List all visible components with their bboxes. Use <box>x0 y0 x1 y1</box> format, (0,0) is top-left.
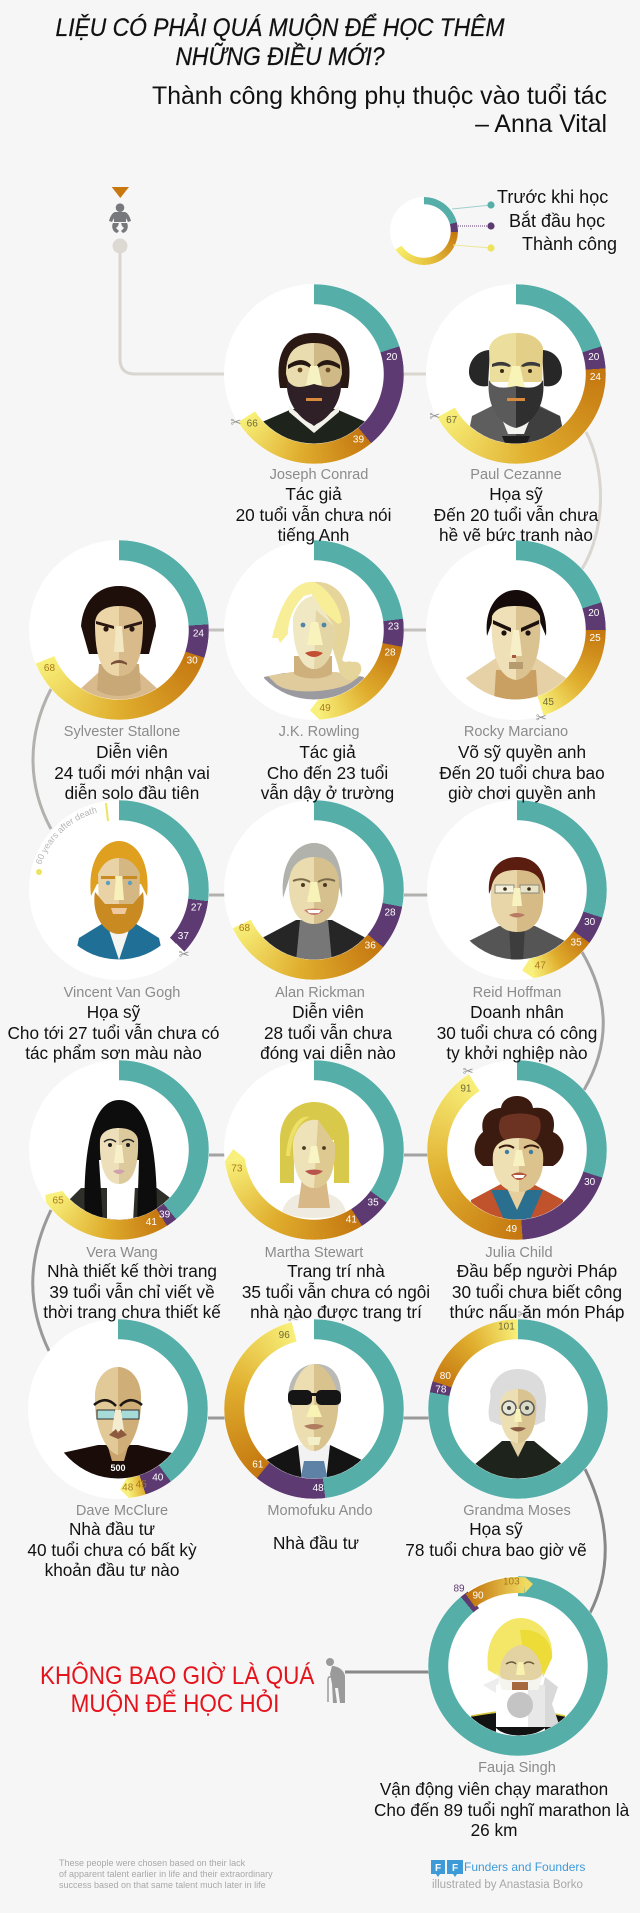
name: Momofuku Ando <box>267 1502 373 1519</box>
logo and credit <box>431 1860 585 1891</box>
description: hề vẽ bức tranh nào <box>439 525 593 545</box>
portrait and age labels: 41 <box>346 1215 357 1226</box>
portrait and age labels: 39 <box>159 1210 170 1221</box>
portrait and age labels: 30 <box>187 656 198 667</box>
portrait and age labels: ✂ <box>230 415 241 430</box>
portrait and age labels: 24 <box>590 372 601 383</box>
person: J.K. Rowling <box>224 540 404 803</box>
description: Đầu bếp người Pháp <box>457 1261 617 1281</box>
name: J.K. Rowling <box>278 723 359 740</box>
subtitle: – Anna Vital <box>475 111 607 138</box>
description: Nhà đầu tư <box>273 1533 359 1553</box>
portrait and age labels: 27 <box>191 902 202 913</box>
portrait and age labels: 91 <box>460 1084 472 1095</box>
description: Trang trí nhà <box>287 1261 385 1281</box>
person: Vincent Van Gogh <box>8 800 219 1063</box>
name: Vera Wang <box>86 1244 158 1261</box>
portrait and age labels: 68 <box>239 923 250 934</box>
description: Vận động viên chạy marathon <box>380 1779 608 1799</box>
description <box>260 742 394 803</box>
person: Martha Stewart <box>224 1060 430 1322</box>
description: Võ sỹ quyền anh <box>458 742 586 762</box>
text: ✂ <box>517 1308 528 1323</box>
description: 20 tuổi vẫn chưa nói <box>236 504 391 524</box>
portrait and age labels: 20 <box>588 352 600 363</box>
person: Reid Hoffman <box>427 800 607 1063</box>
person: Momofuku Ando <box>224 1312 404 1553</box>
person: Vera Wang <box>29 1060 221 1322</box>
portrait and age labels: 24 <box>193 629 204 640</box>
description: giờ chơi quyền anh <box>448 783 596 803</box>
portrait and age labels: ✂ <box>179 948 190 963</box>
portrait and age labels: 45 <box>136 1480 147 1491</box>
description: Diễn viên <box>96 742 168 762</box>
person: Sylvester Stallone <box>29 540 210 803</box>
name: Grandma Moses <box>463 1502 571 1519</box>
portrait and age labels <box>435 1308 561 1478</box>
portrait and age labels: 65 <box>52 1196 64 1207</box>
legend labels <box>497 187 617 254</box>
description: tác phẩm sơn màu nào <box>25 1043 202 1063</box>
icon: F&F logo <box>431 1860 463 1877</box>
description: Cho đến 23 tuổi <box>267 762 388 782</box>
icon: baby start marker <box>109 187 131 254</box>
description: tiếng Anh <box>278 525 349 545</box>
portrait and age labels: 20 <box>588 608 600 619</box>
name: Vincent Van Gogh <box>64 984 180 1000</box>
subtitle: Thành công không phụ thuộc vào tuổi tác <box>152 83 607 110</box>
description: Đến 20 tuổi vẫn chưa <box>434 504 598 524</box>
footer note: of apparent talent earlier in life and their extraordinary <box>59 1869 273 1879</box>
portrait and age labels: 60 years after death <box>36 807 97 864</box>
description: 24 tuổi mới nhận vai <box>54 762 210 782</box>
portrait and age labels: 45 <box>543 697 554 708</box>
description <box>434 484 598 545</box>
description <box>260 1002 396 1063</box>
legend: ring key <box>390 197 495 265</box>
footer note <box>59 1858 273 1890</box>
portrait and age labels: 48 <box>312 1483 324 1494</box>
portrait and age labels: 35 <box>368 1198 379 1209</box>
portrait and age labels: ✂ <box>463 1064 474 1079</box>
person: Fauja Singh <box>374 1576 630 1840</box>
portrait and age labels: 66 <box>246 419 258 430</box>
callout <box>40 1662 314 1718</box>
subtitle <box>152 83 607 138</box>
footer note: These people were chosen based on their lack <box>59 1858 245 1868</box>
portrait and age labels <box>453 1576 566 1736</box>
portrait and age labels: 48 <box>122 1482 134 1493</box>
portrait and age labels <box>470 857 595 978</box>
name: Martha Stewart <box>265 1244 363 1261</box>
portrait and age labels <box>460 1064 596 1235</box>
portrait and age labels: 41 <box>145 1217 157 1228</box>
name: Dave McClure <box>76 1502 168 1519</box>
description: 78 tuổi chưa bao giờ vẽ <box>405 1540 587 1560</box>
description <box>27 1519 197 1580</box>
portrait and age labels <box>230 333 397 445</box>
portrait and age labels: 28 <box>384 648 396 659</box>
portrait and age labels: 103 <box>503 1576 520 1588</box>
person: Alan Rickman <box>224 800 404 1063</box>
portrait and age labels: 30 <box>584 917 595 928</box>
portrait and age labels <box>429 333 601 444</box>
portrait and age labels <box>252 1312 362 1494</box>
description: Cho tới 27 tuổi vẫn chưa có <box>8 1022 219 1042</box>
callout: MUỘN ĐỂ HỌC HỎI <box>71 1690 279 1718</box>
portrait and age labels <box>44 586 204 700</box>
description: Họa sỹ <box>469 1519 523 1539</box>
icon: F&F logo: F <box>452 1863 458 1874</box>
portrait and age labels: 78 <box>435 1384 447 1395</box>
description: nhà nào được trang trí <box>250 1302 422 1322</box>
portrait and age labels <box>64 1367 172 1498</box>
person: Dave McClure <box>27 1319 208 1580</box>
description: Đến 20 tuổi chưa bao <box>439 762 605 782</box>
logo and credit: illustrated by Anastasia Borko <box>432 1879 583 1891</box>
person: Julia Child <box>427 1060 624 1322</box>
description: thời trang chưa thiết kế <box>43 1302 221 1322</box>
portrait and age labels: 96 <box>278 1330 290 1341</box>
description: Họa sỹ <box>489 484 543 504</box>
description: 40 tuổi chưa có bất kỳ <box>27 1540 197 1560</box>
description: 30 tuổi chưa có công <box>437 1022 597 1042</box>
description <box>54 742 210 803</box>
portrait and age labels: 101 <box>498 1321 515 1332</box>
description <box>405 1519 587 1560</box>
name: Joseph Conrad <box>269 466 368 483</box>
portrait and age labels: 49 <box>319 703 331 714</box>
portrait and age labels: 40 <box>152 1472 164 1483</box>
icon: old man with cane <box>326 1658 345 1703</box>
name: Julia Child <box>485 1244 553 1261</box>
name: Paul Cezanne <box>470 466 562 483</box>
icon: F&F logo: F <box>435 1863 441 1874</box>
logo and credit: Funders and Founders <box>464 1860 585 1874</box>
title: NHỮNG ĐIỀU MỚI? <box>175 43 385 71</box>
description <box>43 1261 221 1322</box>
legend labels: Trước khi học <box>497 187 608 207</box>
description: thức nấu ăn món Pháp <box>450 1302 624 1322</box>
description <box>236 484 391 545</box>
portrait and age labels: 37 <box>178 931 189 942</box>
description: Tác giả <box>299 742 356 762</box>
callout: KHÔNG BAO GIỜ LÀ QUÁ <box>40 1662 314 1690</box>
portrait and age labels: 80 <box>440 1371 451 1382</box>
legend labels: Bắt đầu học <box>509 210 605 230</box>
portrait and age labels <box>264 582 399 720</box>
description: 39 tuổi vẫn chỉ viết về <box>49 1282 215 1302</box>
portrait and age labels: 39 <box>352 434 364 445</box>
description: khoản đầu tư nào <box>45 1560 179 1580</box>
description: 35 tuổi vẫn chưa có ngôi <box>242 1282 430 1302</box>
name: Reid Hoffman <box>473 984 561 1000</box>
portrait and age labels: 25 <box>590 633 601 644</box>
portrait and age labels: 28 <box>384 908 396 919</box>
portrait and age labels: 73 <box>231 1164 243 1175</box>
portrait and age labels <box>466 590 601 726</box>
description: Doanh nhân <box>470 1002 564 1022</box>
portrait and age labels: ✂ <box>536 711 547 726</box>
person: Paul Cezanne <box>426 284 606 545</box>
portrait and age labels: 30 <box>584 1177 596 1188</box>
name: Sylvester Stallone <box>64 723 180 740</box>
description <box>439 742 605 803</box>
portrait and age labels: 89 <box>453 1584 465 1594</box>
name: Alan Rickman <box>275 984 365 1000</box>
portrait and age labels: 20 <box>386 352 397 363</box>
description <box>8 1002 219 1063</box>
portrait and age labels: ✂ <box>287 1312 298 1327</box>
portrait and age labels: 36 <box>365 941 376 952</box>
description: 26 km <box>471 1820 517 1840</box>
description <box>437 1002 597 1063</box>
portrait and age labels: 49 <box>506 1224 517 1235</box>
description: 28 tuổi vẫn chưa <box>264 1022 392 1042</box>
portrait and age labels <box>224 1102 379 1226</box>
portrait and age labels: ✂ <box>429 410 440 425</box>
description <box>450 1261 624 1322</box>
portrait and age labels: 23 <box>387 622 399 633</box>
description: Nhà đầu tư <box>69 1519 155 1539</box>
person: Rocky Marciano <box>426 540 606 803</box>
portrait and age labels: 61 <box>252 1460 263 1471</box>
description <box>242 1261 430 1322</box>
person: Joseph Conrad <box>224 284 404 545</box>
description: đóng vai diễn nào <box>260 1043 396 1063</box>
name: Rocky Marciano <box>464 723 568 740</box>
description: Nhà thiết kế thời trang <box>47 1261 217 1281</box>
portrait and age labels: 47 <box>534 961 546 972</box>
description: Diễn viên <box>292 1002 364 1022</box>
description: diễn solo đầu tiên <box>65 783 199 803</box>
portrait and age labels: 90 <box>472 1590 484 1602</box>
portrait and age labels: 35 <box>570 938 582 949</box>
footer note: success based on that same talent much later in life <box>59 1880 266 1890</box>
name: Fauja Singh <box>478 1759 556 1776</box>
description: Cho đến 89 tuổi nghĩ marathon là <box>374 1800 629 1820</box>
description: 30 tuổi chưa biết công <box>452 1282 622 1302</box>
description: Họa sỹ <box>87 1002 140 1022</box>
title <box>56 13 505 71</box>
portrait and age labels: 500 <box>110 1463 126 1473</box>
description: ty khởi nghiệp nào <box>446 1043 588 1063</box>
person: Grandma Moses <box>405 1308 608 1560</box>
portrait and age labels <box>239 843 396 960</box>
description: vẫn dậy ở trường <box>261 783 394 803</box>
description <box>374 1779 630 1840</box>
portrait and age labels: 67 <box>446 415 458 426</box>
portrait and age labels: 68 <box>44 663 55 674</box>
portrait and age labels <box>45 1100 170 1228</box>
portrait and age labels <box>36 802 202 963</box>
legend labels: Thành công <box>522 234 617 254</box>
title: LIỆU CÓ PHẢI QUÁ MUỘN ĐỂ HỌC THÊM <box>56 14 504 42</box>
description: Tác giả <box>285 484 342 504</box>
